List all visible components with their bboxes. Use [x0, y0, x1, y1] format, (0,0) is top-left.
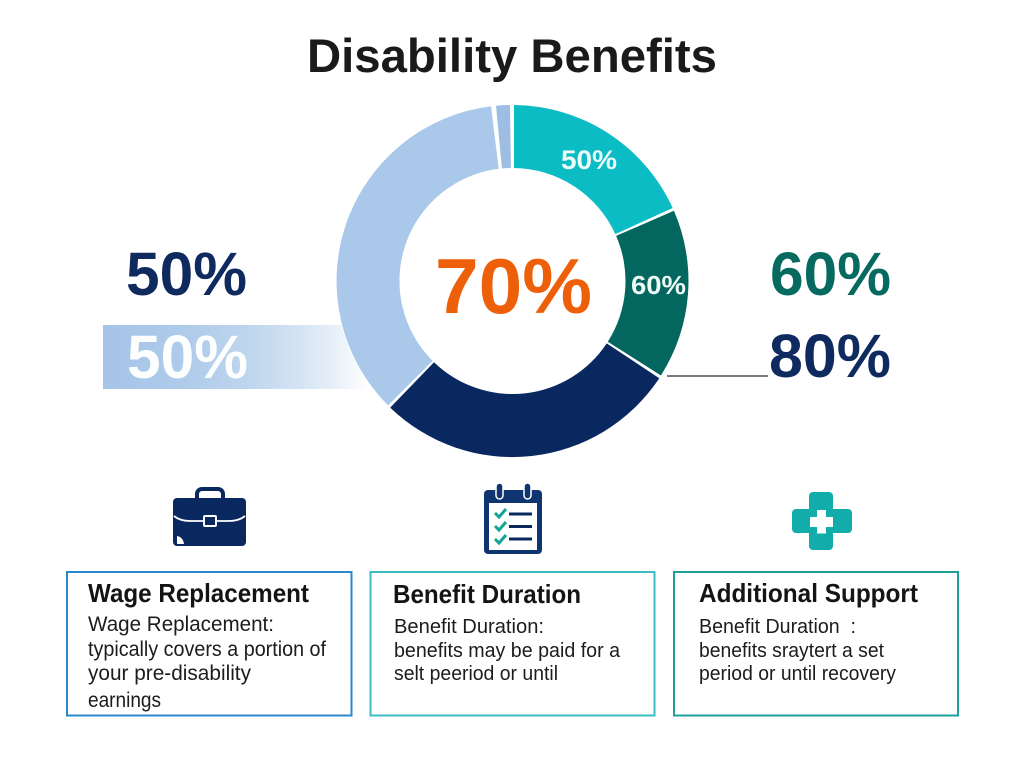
body text: typically covers a portion of — [88, 638, 326, 661]
body text: Benefit Duration: — [394, 616, 544, 638]
highlight bar with 50% label — [103, 323, 368, 391]
title: Disability Benefits — [307, 29, 717, 82]
donut chart — [337, 105, 688, 457]
panel: wage replacement — [67, 572, 352, 716]
icon: calendar checklist — [484, 483, 542, 554]
panel: additional support — [674, 572, 958, 716]
heading: Wage Replacement — [88, 578, 309, 608]
icon: briefcase — [173, 489, 246, 546]
body text — [88, 613, 326, 712]
segment label: 60%: 60% — [631, 270, 686, 300]
right stat: 80%: 80% — [769, 322, 891, 390]
segment: teal — [514, 105, 673, 234]
icon: medical cross — [792, 492, 852, 550]
body text — [699, 616, 896, 685]
body text: benefits sraytert a set — [699, 640, 884, 662]
right stat: 60%: 60% — [770, 240, 891, 308]
body text: Wage Replacement: — [88, 613, 274, 636]
body text: Benefit Duration : — [699, 616, 856, 638]
leader line — [667, 375, 768, 377]
heading: Benefit Duration — [393, 579, 581, 609]
body text — [394, 616, 621, 685]
body text: selt peeriod or until — [394, 663, 558, 685]
segment: navy — [390, 343, 659, 457]
segment: dark green — [608, 211, 688, 376]
body text: earnings — [88, 689, 161, 712]
segment: small blue sliver — [496, 105, 511, 168]
body text: benefits may be paid for a — [394, 640, 621, 662]
highlight bar with 50% label: 50% — [127, 323, 248, 391]
segment label: 50%: 50% — [561, 145, 617, 175]
panel: benefit duration — [370, 572, 654, 716]
left stat: 50%: 50% — [126, 240, 247, 308]
heading: Additional Support — [699, 578, 918, 608]
center value: 70%: 70% — [435, 242, 592, 330]
segment: light blue — [337, 106, 499, 405]
body text: period or until recovery — [699, 663, 896, 685]
body text: your pre-disability — [88, 662, 251, 685]
